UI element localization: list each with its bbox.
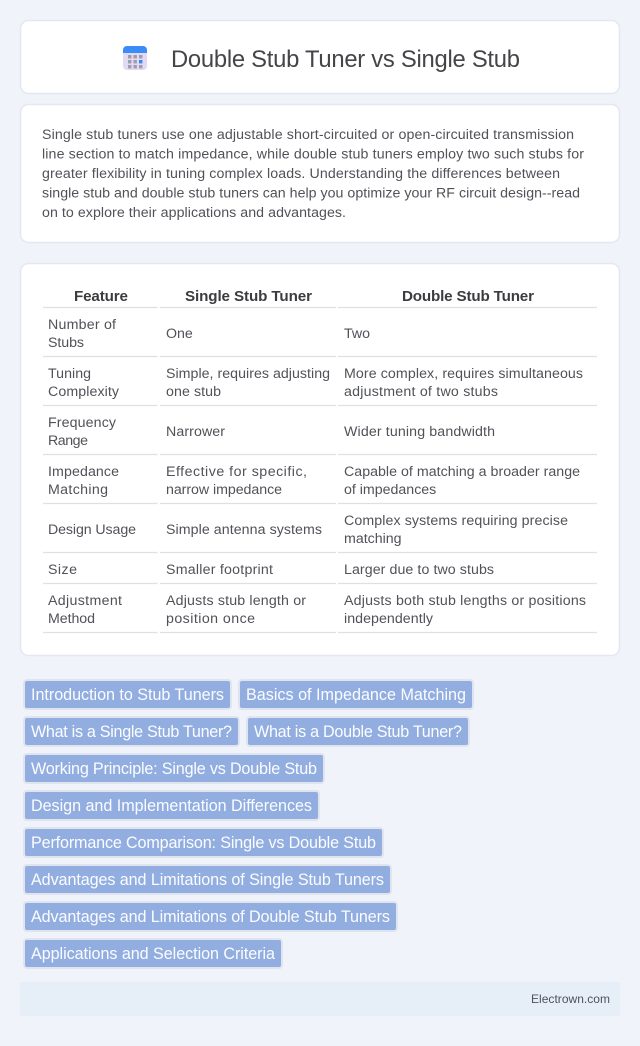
intro paragraph: single stub and double stub tuners can help you optimize your RF circuit design--read [42, 186, 580, 202]
row: frequency range: Narrower [166, 424, 225, 440]
row: impedance matching: Effective for specific, [166, 464, 307, 480]
intro paragraph: greater flexibility in tuning complex loads. Understanding the differences between [42, 166, 560, 182]
row: tuning complexity: one stub [166, 384, 221, 400]
topic tags [24, 680, 473, 968]
intro paragraph [42, 127, 584, 221]
row: adjustment method: Adjusts stub length or [166, 593, 306, 609]
tag: design differences: Design and Implementation Differences [31, 797, 312, 815]
row: frequency range: Frequency [48, 415, 117, 431]
table header: Single Stub Tuner [185, 288, 312, 305]
tag: impedance basics: Basics of Impedance Matching [246, 686, 466, 704]
tag: working principle: Working Principle: Single vs Double Stub [31, 760, 317, 778]
row: design usage: Design Usage [48, 522, 136, 538]
tag: impedance basics [239, 680, 473, 709]
row: number of stubs: Number of [48, 317, 116, 333]
row: adjustment method: Adjusts both stub lengths or positions [344, 593, 586, 609]
row: frequency range [48, 415, 495, 449]
row: number of stubs: One [166, 326, 193, 342]
row: tuning complexity: More complex, requires simultaneous [344, 366, 583, 382]
tag: applications: Applications and Selection Criteria [31, 945, 275, 963]
table header [74, 288, 534, 305]
row: impedance matching: Matching [48, 482, 108, 498]
row: number of stubs: Stubs [48, 335, 84, 351]
tag: introduction: Introduction to Stub Tuners [31, 686, 224, 704]
row: adjustment method: independently [344, 611, 434, 627]
tag: single stub [24, 717, 239, 746]
row: tuning complexity: Tuning [48, 366, 91, 382]
row: adjustment method: Method [48, 611, 95, 627]
row: adjustment method: Adjustment [48, 593, 122, 609]
row: size [48, 562, 494, 578]
row: number of stubs: Two [344, 326, 370, 342]
tag: introduction [24, 680, 231, 709]
row: impedance matching [48, 464, 580, 498]
row: design usage: Complex systems requiring precise [344, 513, 568, 529]
table header: Double Stub Tuner [402, 288, 534, 305]
row: adjustment method: position once [166, 611, 255, 627]
row: tuning complexity: Complexity [48, 384, 120, 400]
row: frequency range: Range [48, 433, 88, 449]
panel: comparison table [20, 264, 620, 656]
row: impedance matching: of impedances [344, 482, 436, 498]
row: impedance matching: narrow impedance [166, 482, 282, 498]
intro paragraph: line section to match impedance, while double stub tuners employ two such stubs for [42, 146, 584, 162]
row: tuning complexity: Simple, requires adjusting [166, 366, 330, 382]
tag: performance comparison [24, 828, 383, 857]
row: impedance matching: Impedance [48, 464, 119, 480]
footer [20, 982, 620, 1016]
row: impedance matching: Capable of matching a broader range [344, 464, 580, 480]
row: frequency range: Wider tuning bandwidth [344, 424, 495, 440]
header panel [20, 20, 620, 94]
tag: working principle [24, 754, 324, 783]
row: tuning complexity: adjustment of two stubs [344, 384, 498, 400]
row: design usage [48, 513, 568, 547]
footer: Electrown.com [531, 992, 610, 1006]
tag: double stub [247, 717, 469, 746]
tag: double stub limitations [24, 902, 397, 931]
row: adjustment method [48, 593, 586, 627]
table header: Feature [74, 288, 128, 305]
row: size: Size [48, 562, 77, 578]
row: size: Larger due to two stubs [344, 562, 494, 578]
row: design usage: Simple antenna systems [166, 522, 322, 538]
tag: single stub limitations [24, 865, 391, 894]
panel: introduction [20, 104, 620, 242]
row: design usage: matching [344, 531, 402, 547]
row: tuning complexity [48, 366, 583, 400]
tag: single stub: What is a Single Stub Tuner? [31, 723, 232, 741]
tag: design differences [24, 791, 319, 820]
row: number of stubs [48, 317, 370, 351]
tag: double stub limitations: Advantages and Limitations of Double Stub Tuners [31, 908, 390, 926]
tag: applications [24, 939, 282, 968]
tag: single stub limitations: Advantages and Limitations of Single Stub Tuners [31, 871, 384, 889]
title: Double Stub Tuner vs Single Stub [171, 46, 520, 73]
intro paragraph: Single stub tuners use one adjustable short-circuited or open-circuited transmission [42, 127, 574, 143]
intro paragraph: on to explore their applications and advantages. [42, 205, 346, 221]
tag: double stub: What is a Double Stub Tuner? [254, 723, 462, 741]
row: size: Smaller footprint [166, 562, 273, 578]
tag: performance comparison: Performance Comparison: Single vs Double Stub [31, 834, 376, 852]
icon: calendar [123, 46, 147, 70]
